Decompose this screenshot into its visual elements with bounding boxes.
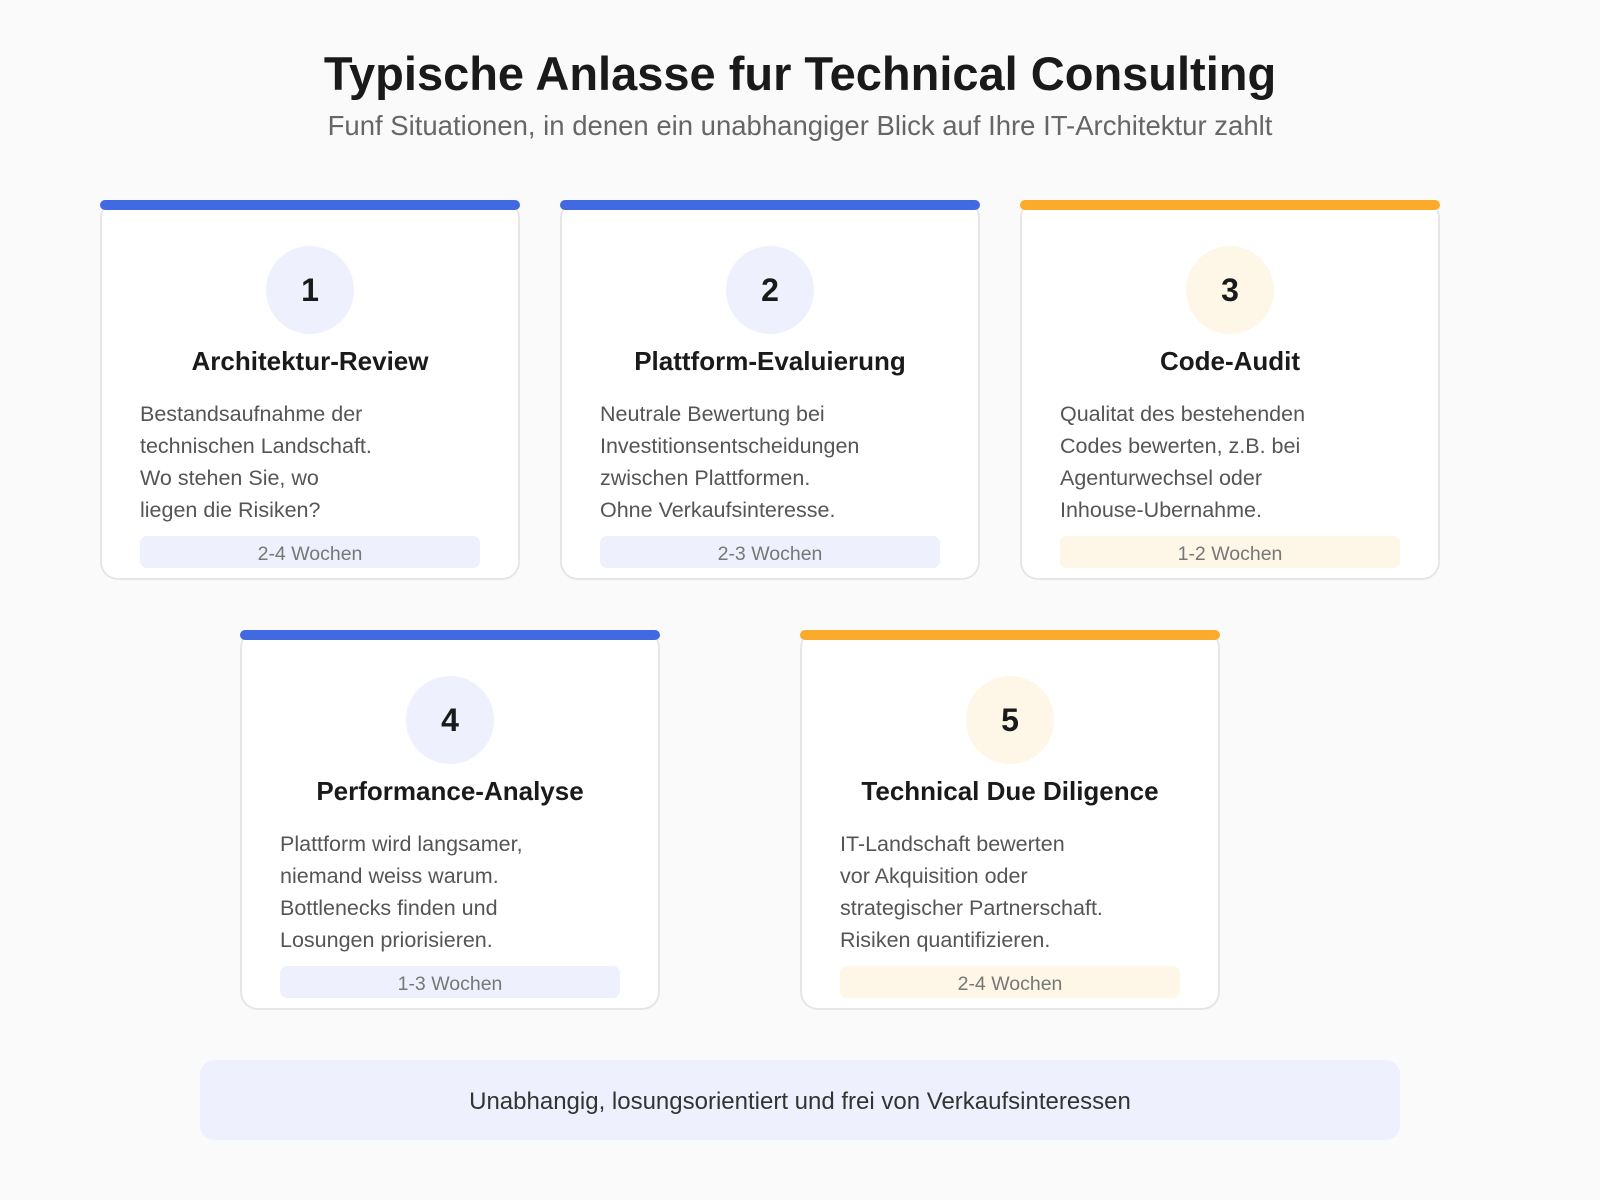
description 4: Bottlenecks finden und (280, 896, 498, 920)
description 2: Investitionsentscheidungen (600, 434, 859, 458)
description 1 (140, 402, 372, 522)
description 3: Inhouse-Ubernahme. (1060, 498, 1262, 522)
number badge 4: 4 (441, 702, 459, 738)
number badge 3 (1186, 246, 1274, 334)
duration tag 3: 1-2 Wochen (1178, 543, 1282, 565)
card title 3: Code-Audit (1160, 346, 1300, 376)
description 2 (600, 402, 859, 522)
description 2: Ohne Verkaufsinteresse. (600, 498, 835, 522)
duration tag 1 (140, 536, 480, 568)
duration tag 4 (280, 966, 620, 998)
number badge 2: 2 (761, 272, 779, 308)
number badge 1 (266, 246, 354, 334)
description 1: Bestandsaufnahme der (140, 402, 362, 426)
duration tag 2 (600, 536, 940, 568)
title: Typische Anlasse fur Technical Consulting (324, 47, 1276, 100)
subtitle: Funf Situationen, in denen ein unabhangiger Blick auf Ihre IT-Architektur zahlt (328, 110, 1272, 141)
description 3: Codes bewerten, z.B. bei (1060, 434, 1300, 458)
duration tag 1: 2-4 Wochen (258, 543, 362, 565)
duration tag 5: 2-4 Wochen (958, 973, 1062, 995)
description 5: IT-Landschaft bewerten (840, 832, 1065, 856)
description 4: Plattform wird langsamer, (280, 832, 523, 856)
description 3 (1060, 402, 1305, 522)
panel: card 4 (240, 630, 660, 1010)
description 1: Wo stehen Sie, wo (140, 466, 319, 490)
description 2: zwischen Plattformen. (600, 466, 810, 490)
duration tag 5 (840, 966, 1180, 998)
card title 4: Performance-Analyse (316, 776, 584, 806)
panel: card 3 (1020, 200, 1440, 580)
footer banner: Unabhangig, losungsorientiert und frei von Verkaufsinteressen (469, 1088, 1131, 1115)
description 2: Neutrale Bewertung bei (600, 402, 825, 426)
description 4: Losungen priorisieren. (280, 928, 493, 952)
description 5 (840, 832, 1103, 952)
description 1: liegen die Risiken? (140, 498, 320, 522)
panel: card 5 (800, 630, 1220, 1010)
panel: card 1 (100, 200, 520, 580)
number badge 5 (966, 676, 1054, 764)
number badge 3: 3 (1221, 272, 1239, 308)
description 5: strategischer Partnerschaft. (840, 896, 1103, 920)
duration tag 4: 1-3 Wochen (398, 973, 502, 995)
description 5: vor Akquisition oder (840, 864, 1028, 888)
description 4 (280, 832, 523, 952)
number badge 2 (726, 246, 814, 334)
footer banner (200, 1060, 1400, 1140)
description 1: technischen Landschaft. (140, 434, 372, 458)
card title 2: Plattform-Evaluierung (634, 346, 906, 376)
number badge 5: 5 (1001, 702, 1019, 738)
panel: card 2 (560, 200, 980, 580)
duration tag 2: 2-3 Wochen (718, 543, 822, 565)
description 3: Agenturwechsel oder (1060, 466, 1262, 490)
card title 5: Technical Due Diligence (861, 776, 1159, 806)
duration tag 3 (1060, 536, 1400, 568)
description 4: niemand weiss warum. (280, 864, 499, 888)
description 5: Risiken quantifizieren. (840, 928, 1050, 952)
number badge 1: 1 (301, 272, 319, 308)
description 3: Qualitat des bestehenden (1060, 402, 1305, 426)
number badge 4 (406, 676, 494, 764)
card title 1: Architektur-Review (192, 346, 428, 376)
